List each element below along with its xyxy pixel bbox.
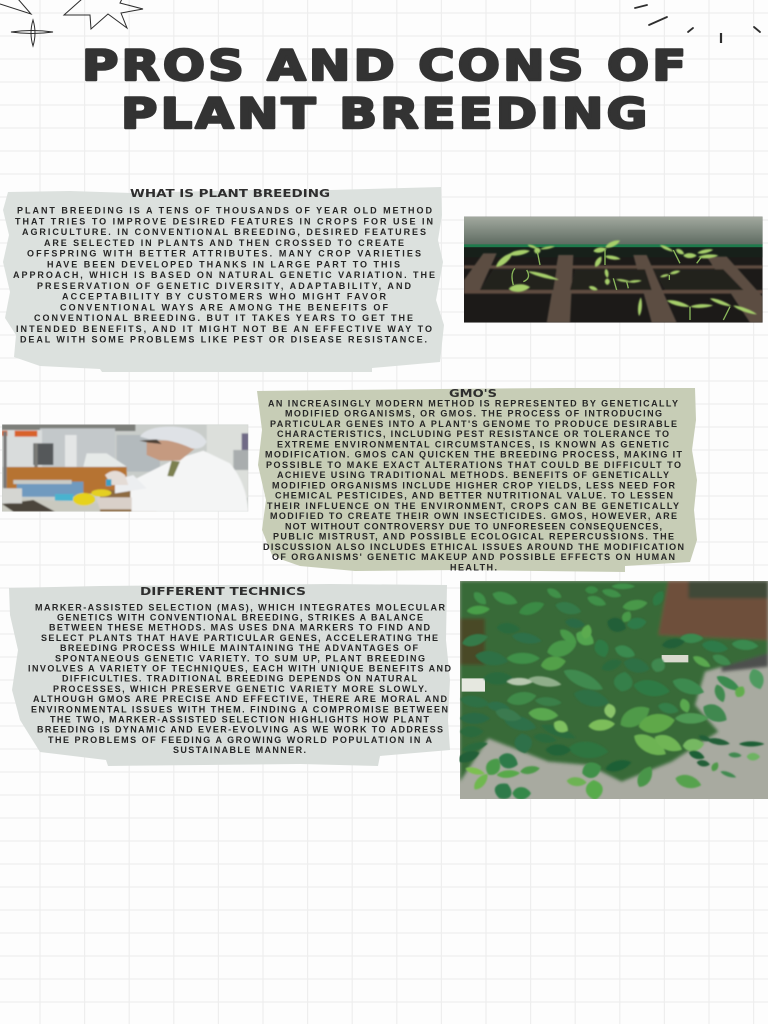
- text block: gmo description: DISCUSSION ALSO INCLUDES ETHICAL ISSUES AROUND THE MODIFICATION: [263, 542, 684, 552]
- panel: what is plant breeding: [3, 187, 444, 372]
- title: [82, 41, 686, 138]
- text block: plant breeding definition: ARE SELECTED IN PLANTS AND THEN CROSSED TO CREATE: [44, 238, 404, 248]
- text block: plant breeding definition: APPROACH, WHICH IS BASED ON NATURAL GENETIC VARIATION. THE: [13, 270, 435, 280]
- text block: gmo description: EXTREME ENVIRONMENTAL CIRCUMSTANCES, IS KNOWN AS GENETIC: [277, 439, 670, 449]
- text block: marker-assisted selection: SPONTANEOUS GENETIC VARIETY. TO SUM UP, PLANT BREEDING: [55, 653, 425, 663]
- text block: marker-assisted selection: BREEDING PROCESS WHILE MAINTAINING THE ADVANTAGES OF: [60, 643, 419, 653]
- text block: gmo description: CHEMICAL PESTICIDES, AND BETTER NUTRITIONAL VALUE. TO LESSEN: [275, 490, 673, 500]
- icon: radiating dashes, top right: [635, 5, 760, 43]
- text block: plant breeding definition: CONVENTIONAL WAYS ARE AMONG THE BENEFITS OF: [60, 302, 389, 312]
- text block: gmo description: MODIFIED ORGANISMS INCLUDE HIGHER CROP YIELDS, LESS NEED FOR: [272, 480, 675, 490]
- text block: gmo description: PARTICULAR GENES INTO A PLANT'S GENOME TO PRODUCE DESIRABLE: [270, 419, 677, 429]
- text block: plant breeding definition: [13, 206, 435, 345]
- photo: seedlings in tray: [464, 217, 763, 323]
- text block: marker-assisted selection: BETWEEN THESE METHODS. MAS USES DNA MARKERS TO FIND AND: [49, 623, 430, 633]
- panel: gmos: [257, 387, 697, 572]
- title: PROS AND CONS OF: [82, 41, 686, 90]
- text block: marker-assisted selection: THE PROBLEMS OF FEEDING A GROWING WORLD POPULATION IN A: [48, 735, 432, 745]
- icon: star outline: [64, 0, 143, 29]
- text block: marker-assisted selection: DIFFICULTIES. TRADITIONAL BREEDING DEPENDS ON NATURAL: [62, 674, 418, 684]
- text block: marker-assisted selection: SELECT PLANTS THAT HAVE PARTICULAR GENES, ACCELERATING THE: [41, 633, 438, 643]
- text block: marker-assisted selection: [28, 602, 452, 755]
- text block: plant breeding definition: AGRICULTURE. IN CONVENTIONAL BREEDING, DESIRED FEATURES: [22, 227, 426, 237]
- text block: plant breeding definition: OFFSPRING WITH BETTER ATTRIBUTES. MANY CROP VARIETIES: [27, 248, 421, 258]
- text block: gmo description: MODIFICATION. GMOS CAN QUICKEN THE BREEDING PROCESS, MAKING IT: [265, 450, 682, 460]
- text block: gmo description: CHARACTERISTICS, INCLUDING PEST RESISTANCE OR TOLERANCE TO: [277, 429, 669, 439]
- text block: plant breeding definition: ACCEPTABILITY BY CUSTOMERS WHO MIGHT FAVOR: [62, 292, 386, 302]
- text block: plant breeding definition: INTENDED BENEFITS, AND IT MIGHT NOT BE AN EFFECTIVE WAY TO: [16, 324, 432, 334]
- text block: plant breeding definition: PRESERVATION OF GENETIC DIVERSITY, ADAPTABILITY, AND: [37, 281, 412, 291]
- text block: gmo description: PUBLIC MISTRUST, AND POSSIBLE ECOLOGICAL REPERCUSSIONS. THE: [273, 532, 674, 542]
- text block: gmo description: HEALTH.: [450, 562, 497, 572]
- icon: corner burst, top left: [0, 0, 53, 46]
- heading: gmo's: GMO'S: [449, 387, 497, 400]
- text block: marker-assisted selection: BREEDING IS DYNAMIC AND EVER-EVOLVING AS WE WORK TO ADDRESS: [37, 725, 443, 735]
- text block: plant breeding definition: THAT TRIES TO IMPROVE DESIRED FEATURES IN CROPS FOR USE IN: [15, 216, 433, 226]
- text block: marker-assisted selection: SUSTAINABLE MANNER.: [173, 745, 306, 755]
- text block: gmo description: [263, 398, 684, 572]
- text block: gmo description: OF ORGANISMS' GENETIC MAKEUP AND POSSIBLE EFFECTS ON HUMAN: [272, 552, 675, 562]
- photo: scientist in laboratory: [2, 424, 248, 512]
- text block: marker-assisted selection: PROCESSES, WHICH PRESERVE GENETIC VARIETY MORE SLOWLY.: [53, 684, 427, 694]
- text block: gmo description: THEIR INFLUENCE ON THE ENVIRONMENT, CROPS CAN BE GENETICALLY: [267, 501, 679, 511]
- text block: plant breeding definition: DEAL WITH SOME PROBLEMS LIKE PEST OR DISEASE RESISTANCE.: [20, 335, 427, 345]
- text block: plant breeding definition: CONVENTIONAL BREEDING. BUT IT TAKES YEARS TO GET THE: [34, 313, 413, 323]
- text block: marker-assisted selection: ALTHOUGH GMOS ARE PRECISE AND EFFECTIVE, THERE ARE MORAL AND: [33, 694, 448, 704]
- title: PLANT BREEDING: [121, 89, 647, 138]
- text block: marker-assisted selection: THE TWO, MARKER-ASSISTED SELECTION HIGHLIGHTS HOW PLANT: [50, 714, 430, 724]
- text block: marker-assisted selection: ENVIRONMENTAL ISSUES WITH THEM. FINDING A COMPROMISE BETWEEN: [31, 704, 448, 714]
- heading: what is plant breeding: WHAT IS PLANT BREEDING: [130, 187, 330, 200]
- panel: different technics: [9, 584, 452, 766]
- text block: marker-assisted selection: GENETICS WITH CONVENTIONAL BREEDING, STRIKES A BALANCE: [57, 612, 423, 622]
- text block: marker-assisted selection: MARKER-ASSISTED SELECTION (MAS), WHICH INTEGRATES MOLECULAR: [35, 602, 446, 612]
- text block: gmo description: AN INCREASINGLY MODERN METHOD IS REPRESENTED BY GENETICALLY: [268, 398, 678, 408]
- text block: plant breeding definition: HAVE BEEN DEVELOPED THANKS IN LARGE PART TO THIS: [47, 259, 400, 269]
- text block: gmo description: ACHIEVE USING TRADITIONAL METHODS. BENEFITS OF GENETICALLY: [277, 470, 669, 480]
- text block: gmo description: NOT WITHOUT CONTROVERSY DUE TO UNFORESEEN CONSEQUENCES,: [285, 521, 662, 531]
- photo: green leafy plant: [456, 581, 768, 803]
- text block: gmo description: MODIFIED ORGANISMS, OR GMOS. THE PROCESS OF INTRODUCING: [285, 408, 662, 418]
- text block: marker-assisted selection: INVOLVES A VARIETY OF TECHNIQUES, EACH WITH UNIQUE BENEFITS AND: [28, 664, 452, 674]
- heading: different technics: DIFFERENT TECHNICS: [140, 585, 306, 598]
- text block: plant breeding definition: PLANT BREEDING IS A TENS OF THOUSANDS OF YEAR OLD METHOD: [17, 206, 432, 216]
- text block: gmo description: MODIFIED TO CREATE THEIR OWN INSECTICIDES. GMOS, HOWEVER, ARE: [270, 511, 677, 521]
- text block: gmo description: POSSIBLE TO MAKE EXACT ALTERATIONS THAT COULD BE DIFFICULT TO: [266, 460, 681, 470]
